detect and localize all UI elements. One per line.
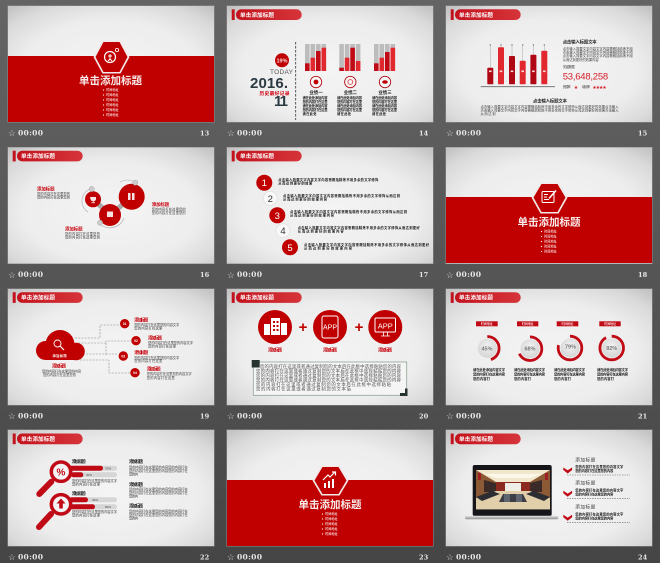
today badge and date: 11	[274, 93, 288, 110]
panel: slide 19 cloud diagram	[8, 288, 214, 406]
label right: 您的内容打在这里您的	[152, 210, 186, 215]
today badge and date: 19%	[276, 58, 288, 64]
node text: 您的内容打在这里您的内容文字	[148, 340, 194, 345]
label right: 您的内容打在这里您的	[152, 206, 186, 211]
right text block: 点击输入标题文本	[563, 38, 597, 46]
donut 68%: 68%	[524, 347, 536, 353]
list text: 从而达到更好的效果内容	[304, 246, 353, 250]
bullet list	[541, 229, 558, 254]
header tab: 单击添加标题	[459, 11, 493, 19]
right column text: 您的内	[129, 493, 138, 498]
candle bar chart	[481, 44, 555, 87]
dashed rules	[567, 475, 630, 523]
icon: monitor app circle: APP	[378, 322, 393, 330]
panel: slide 21 donut charts	[446, 288, 652, 406]
footer slide 19: 19	[200, 412, 210, 420]
panel: slide 14 statistics	[226, 6, 434, 122]
panel: slide 17 numbered list	[226, 147, 434, 264]
node text	[134, 317, 194, 380]
column labels and text: 请在此处添加内容	[302, 95, 328, 100]
header tab: 单击添加标题	[459, 294, 493, 302]
footer slide 15	[446, 128, 648, 139]
donut 45%: 45%	[481, 346, 493, 352]
footer slide 16: 00:00	[18, 270, 43, 279]
header tab: 单击添加标题	[240, 11, 274, 19]
node text: 添加标题	[148, 334, 163, 341]
captions: 请在此处添加内容文字	[473, 367, 506, 372]
numbered nodes: 03	[121, 354, 125, 358]
bottom text block	[480, 98, 619, 116]
bullet list: 时间地址	[325, 511, 339, 516]
donut 92%: 时间地址	[604, 321, 617, 326]
icon: monitor app circle	[368, 310, 402, 344]
bar chart group 1	[305, 44, 326, 71]
panel: slide 20 plus equation	[226, 288, 434, 406]
label top left: 您的内容打在这里您的	[37, 195, 71, 200]
panel: slide 23 title slide	[226, 430, 434, 546]
footer slide 19: 00:00	[18, 412, 43, 420]
bullet list: 时间地址	[106, 97, 120, 102]
node text: 您的内容打在这里	[134, 358, 163, 363]
numbered nodes: 01	[123, 322, 127, 326]
right column text: 您的内	[129, 515, 138, 520]
bullet list	[103, 87, 120, 117]
progress bars 40 and 60: 60%	[105, 505, 111, 509]
item text: 添加标题	[575, 504, 596, 510]
bullet list: 时间地址	[544, 244, 558, 249]
right column text: 您的内容打在这里您的内容您的内容打在	[129, 464, 188, 470]
icon: cloud: 添加标题	[52, 353, 67, 358]
captions: 您的内容打	[514, 376, 532, 381]
node text: 您的内容打在这里您的内容文字	[134, 355, 180, 360]
footer slide 24: 24	[638, 554, 648, 562]
donut 45%	[476, 321, 499, 360]
today badge and date: 2016.	[250, 75, 288, 92]
icon: phone app circle	[313, 310, 347, 344]
right text block: 点击输入简要文字内容文字内容需概括精炼不用	[563, 50, 633, 54]
list text: 从而达到更好的效果内容	[290, 212, 335, 218]
node text: 添加标题	[134, 317, 149, 324]
icon: buildings circle	[258, 310, 292, 344]
dashed timeline	[295, 42, 297, 120]
item text: 添加标题	[575, 456, 596, 464]
footer slide 19: ☆	[8, 412, 16, 422]
bullet list: 时间地址	[544, 239, 558, 244]
bullet list: 时间地址	[106, 87, 120, 92]
right column text: 您的内容打在这里您的内容您的内容打在	[129, 468, 188, 473]
progress bars 40 and 60	[69, 497, 117, 509]
donut 79%	[557, 321, 582, 360]
label top left: 添加标题	[37, 186, 55, 192]
text frame	[252, 360, 408, 396]
bullet list: 时间地址	[325, 531, 339, 536]
footer slide 23: 00:00	[237, 552, 262, 562]
number circles: 1	[262, 178, 267, 189]
number circles	[256, 175, 298, 255]
list text: 从而达到更好的效果内容	[283, 196, 328, 202]
circle labels: 添加标题	[378, 346, 393, 354]
footer slide 14	[227, 128, 429, 139]
label right: 添加标题	[152, 201, 170, 208]
right text block: 点击输入简要文字内容文字内容需概括精炼不用	[563, 46, 633, 51]
right text block: 关键数据	[563, 64, 575, 69]
bullet list: 时间地址	[106, 92, 120, 97]
column labels and text: 请在此处添加内容	[337, 95, 363, 100]
label bottom: 您的内容打在这里您的	[65, 234, 101, 240]
item text: 添加标题	[575, 480, 596, 486]
bottom text block: 点击输入简要文字内容文字内容需概括精炼不用多余的文字修饰从而达到更好的效果点击输入	[480, 108, 619, 112]
panel: slide 15 column chart	[446, 6, 652, 122]
footer slide 13: ☆	[8, 129, 16, 139]
label bottom: 您的内容打在这里您的	[65, 231, 101, 236]
footer slide 20: 00:00	[237, 412, 262, 420]
header tab: 单击添加标题	[459, 435, 493, 443]
footer slide 18: 00:00	[456, 270, 481, 279]
column labels and text: 业绩三	[378, 89, 392, 96]
list text: 点击输入简要文字内容文字内容需概括精炼不用多余的文字修饰从而达到更好	[304, 242, 430, 247]
captions: 您的内容打在这里内容	[554, 372, 586, 376]
bullet list: 时间地址	[325, 516, 339, 521]
node text: 添加标题	[147, 365, 161, 372]
column labels and text: 请在此处添加内容	[372, 103, 398, 108]
node text: 您的内容打在这里您的内容文字	[134, 322, 180, 327]
progress bars 70 and 30: 30%	[86, 473, 92, 477]
captions: 您的内容打	[473, 376, 491, 381]
list text: 从而达到更好的效果	[278, 180, 313, 186]
bullet list: 时间地址	[325, 526, 339, 531]
footer slide 15: 00:00	[456, 128, 481, 138]
text lower: 添加标题	[72, 490, 86, 497]
column labels and text: 请在此处添加内容	[337, 103, 363, 108]
footer slide 13: 00:00	[18, 128, 43, 138]
header tab	[451, 292, 521, 303]
panel: slide 16 connected circles	[8, 147, 214, 264]
footer slide 13: 13	[200, 130, 210, 138]
right text block: ★	[574, 84, 578, 90]
text lower: 您的内容打在这里您的内容文字	[72, 509, 118, 514]
right column text: 添加标题	[129, 481, 144, 488]
node text: 添加标题	[134, 349, 149, 356]
header tab	[451, 434, 521, 444]
list text	[278, 177, 430, 250]
header tab: 单击添加标题	[21, 152, 55, 160]
bullet list: 时间地址	[106, 102, 120, 107]
item text: 您的内容打在这里您的内容	[575, 515, 614, 520]
footer slide 20: 20	[419, 412, 429, 420]
column labels and text: 业绩一	[309, 89, 323, 96]
header tab	[13, 292, 83, 303]
icon: magnifier percent	[39, 462, 71, 494]
circle labels	[268, 346, 393, 354]
item text: 您的内容打在这里您的内容文字	[575, 512, 624, 516]
number circles: 4	[280, 226, 286, 237]
right text block: ★★★★	[592, 84, 606, 90]
footer slide 23	[227, 552, 429, 563]
header tab	[451, 9, 521, 20]
number circles: 5	[287, 243, 293, 254]
icon: phone app circle: APP	[323, 324, 337, 332]
node text: 您的内容打在这里	[147, 375, 175, 380]
captions: 您的内容打	[554, 376, 572, 381]
header tab: 单击添加标题	[240, 294, 274, 302]
text upper: 您的内容打在这里您的内容文字	[72, 478, 118, 483]
donut 68%	[517, 321, 542, 360]
panel: slide 24 laptop	[446, 430, 652, 546]
footer slide 16	[8, 270, 210, 281]
right text block: 53,648,258	[563, 72, 608, 82]
footer slide 15: ☆	[446, 129, 454, 139]
column labels and text: 您的内容打在这里	[337, 107, 363, 112]
icon: cloud	[36, 330, 85, 360]
text upper	[72, 458, 118, 486]
right text block: 增长率	[582, 84, 591, 89]
text lower: 您的内容打在这里	[72, 512, 101, 518]
list text: 点击输入简要文字内容文字内容需概括精炼不用多余的文字修饰	[278, 177, 379, 182]
label top left	[37, 186, 71, 200]
footer slide 18: 18	[638, 271, 648, 279]
icon: magnifier arrow	[39, 495, 71, 527]
panel: slide 22 magnifiers	[8, 430, 214, 546]
icon: pencil and note	[542, 190, 556, 202]
footer slide 22: 22	[200, 554, 209, 562]
text frame: 您的内容打在这里或者通过复制您的文本后在此框中选择粘贴您的内容	[256, 368, 402, 374]
text lower	[72, 490, 118, 518]
item text	[575, 456, 624, 520]
footer slide 24	[446, 552, 648, 563]
label top left: 您的内容打在这里您的	[37, 191, 71, 196]
node text: 您的内容打在这里	[148, 344, 177, 348]
right text block: 点击输入简要文字内容文字内容需概括精炼不用	[563, 53, 633, 58]
item text: 您的内容打在这里您的内容	[575, 468, 614, 473]
numbered nodes	[119, 319, 141, 377]
header tab	[232, 292, 302, 303]
footer slide 16: ☆	[8, 271, 16, 281]
progress bars 70 and 30: 70%	[105, 466, 111, 470]
icon: rising chart	[323, 472, 336, 488]
captions	[473, 367, 629, 381]
footer slide 21: ☆	[446, 412, 454, 422]
text frame: 您的内容打在这里或者通过复制您的文本后在此框中选择粘贴您的内容	[260, 363, 402, 370]
list text: 点击输入简要文字内容文字内容需概括精炼不用多余的文字修饰从而达到	[290, 209, 408, 214]
captions: 您的内容打在这里内容	[473, 372, 506, 376]
progress bars 40 and 60: 40%	[92, 498, 98, 502]
icon: plus: +	[299, 319, 308, 336]
right text block: 完成率	[563, 84, 571, 89]
right column text: 您的内容打在这里您的内容您的内容打在	[129, 486, 188, 491]
list text: 从而达到更好的效果内容	[298, 228, 344, 234]
footer slide 15: 15	[638, 130, 648, 138]
chevrons	[563, 468, 572, 521]
slide title: 单击添加标题	[79, 74, 142, 87]
text frame: 您的内容打在这里或者通过复制您的文本后在此框中选择粘贴您的内容	[256, 372, 402, 379]
footer slide 24: ☆	[446, 553, 454, 563]
bar chart group 2	[339, 44, 360, 71]
right column text: 您的内容打在这里您的内容您的内容打在	[129, 508, 188, 513]
footer slide 21: 21	[638, 412, 647, 420]
numbered nodes: 02	[134, 339, 138, 343]
right text block: 从而达到更好的效果内容	[563, 57, 599, 62]
captions: 您的内容打	[597, 376, 615, 381]
bullet list: 时间地址	[325, 521, 339, 526]
footer slide 14: 14	[419, 130, 429, 138]
footer slide 16: 16	[200, 271, 210, 279]
footer slide 20	[227, 412, 429, 422]
today badge and date: TODAY	[270, 69, 294, 76]
donut 92%	[599, 321, 624, 360]
footer slide 23: 23	[419, 554, 429, 562]
circle labels: 添加标题	[268, 346, 283, 354]
donut 45%: 时间地址	[481, 321, 494, 326]
right column text	[129, 458, 188, 520]
panel: slide 18 title slide	[446, 147, 652, 264]
circle diagram	[82, 180, 145, 228]
number circles: 3	[275, 211, 280, 222]
column labels and text	[302, 89, 398, 116]
footer slide 21	[446, 412, 647, 422]
right text block	[563, 38, 633, 90]
item text: 您的内容打在这里您的内容文字	[575, 464, 624, 469]
bullet list: 时间地址	[544, 229, 558, 234]
cloud caption: 您的内容打在这里您的	[43, 372, 77, 377]
header tab: 单击添加标题	[240, 152, 274, 160]
footer slide 21: 00:00	[456, 412, 481, 420]
donut 79%: 79%	[565, 344, 576, 350]
donut 68%: 时间地址	[522, 321, 535, 326]
list text: 点击输入简要文字内容文字内容需概括精炼不用多余的文字修饰从而达到更好	[298, 225, 420, 230]
text frame: 您的内容打在这里或者通过复制您的文本后在此框中选择粘贴您的内容	[256, 376, 402, 384]
cloud caption	[42, 362, 82, 377]
column labels and text: 您的内容打在这里	[337, 99, 363, 104]
column labels and text: 您的内容打在这里	[302, 107, 328, 112]
footer slide 19	[8, 412, 210, 422]
numbered nodes: 04	[133, 371, 137, 375]
bottom text block: 从而达到	[480, 111, 496, 116]
node text: 您的内容打在这里	[134, 326, 163, 330]
header tab: 单击添加标题	[21, 294, 55, 302]
column labels and text: 请在此处添加内容	[372, 95, 398, 100]
item text: 您的内容打在这里您的内容	[575, 491, 614, 496]
text upper: 您的内容打在这里	[72, 482, 101, 486]
item text: 您的内容打在这里您的内容文字	[575, 488, 624, 492]
footer slide 24: 00:00	[456, 552, 481, 562]
circle labels: 添加标题	[323, 346, 338, 354]
column labels and text: 请在此处添加内容	[302, 103, 328, 108]
column labels and text: 请在此处	[337, 111, 352, 116]
footer slide 22	[8, 552, 209, 563]
slide title: 单击添加标题	[298, 498, 362, 511]
captions: 请在此处添加内容文字	[597, 367, 629, 372]
bullet list	[322, 511, 339, 536]
footer slide 14: 00:00	[237, 128, 262, 138]
captions: 您的内容打在这里内容	[597, 372, 629, 376]
donut 92%: 92%	[606, 346, 617, 352]
right column text: 添加标题	[129, 458, 144, 465]
footer slide 22: ☆	[8, 553, 16, 563]
cloud caption: 添加标题	[52, 362, 67, 369]
panel: slide 13 title slide	[8, 6, 214, 122]
bullet list: 时间地址	[544, 249, 558, 254]
footer slide 14: ☆	[227, 129, 235, 139]
bottom text block: 点击输入标题文本	[533, 98, 568, 104]
footer slide 22: 00:00	[18, 552, 43, 562]
laptop with meeting room photo	[465, 465, 558, 519]
text upper: 添加标题	[72, 458, 86, 465]
captions: 请在此处添加内容文字	[514, 367, 546, 372]
column labels and text: 请在此处	[372, 111, 387, 116]
footer slide 18	[446, 270, 648, 281]
right column text: 您的内容打在这里您的内容您的内容打在	[129, 490, 188, 495]
right column text: 您的内	[129, 472, 138, 476]
node text: 您的内容打在这里您的内容文字	[147, 371, 192, 376]
footer slide 20: ☆	[227, 412, 235, 422]
right column text: 添加标题	[129, 502, 144, 510]
footer slide 17: 17	[419, 271, 429, 279]
captions: 您的内容打在这里内容	[514, 372, 546, 376]
footer slide 17: ☆	[227, 271, 235, 281]
column labels and text: 业绩二	[344, 89, 357, 96]
footer slide 18: ☆	[446, 271, 454, 281]
today badge and date	[250, 53, 294, 110]
header tab	[232, 9, 302, 20]
column labels and text: 您的内容打在这里	[372, 107, 398, 112]
footer slide 23: ☆	[227, 553, 235, 563]
text frame: 您的内容打在这里或者通过复制您的文本后	[256, 386, 352, 392]
column labels and text: 请在此处	[302, 111, 317, 116]
captions: 请在此处添加内容文字	[554, 367, 586, 372]
donut 79%: 时间地址	[562, 321, 574, 326]
label bottom	[65, 226, 101, 240]
column labels and text: 您的内容打在这里	[302, 99, 328, 104]
bullet list: 时间地址	[106, 112, 120, 117]
bottom text block: 点击输入简要文字内容文字内容需概括精炼不用多余的文字修饰从而达到更好的效果点击输入	[480, 104, 619, 109]
header tab: 单击添加标题	[21, 435, 55, 443]
column labels and text: 您的内容打在这里	[372, 99, 398, 104]
icon circles	[310, 76, 391, 88]
footer slide 13	[8, 128, 210, 139]
header tab	[13, 151, 83, 161]
text frame: 您的内容打在这里或者通过复制您的文本后在此框中选择粘贴	[256, 381, 392, 388]
bullet list: 时间地址	[544, 234, 558, 239]
number circles: 2	[268, 194, 273, 205]
icon: magnifier percent: %	[57, 468, 66, 478]
footer slide 17: 00:00	[237, 270, 262, 279]
progress bars 70 and 30	[69, 466, 117, 477]
dashed connectors	[75, 325, 131, 373]
bar chart group 3	[374, 44, 395, 71]
right column text: 您的内容打在这里您的内容您的内容打在	[129, 512, 188, 517]
cloud caption: 您的内容打在这里您的内容	[42, 368, 82, 374]
today badge and date: 历史最好记录	[260, 90, 290, 97]
footer slide 17	[227, 270, 429, 281]
icon: clock person	[104, 48, 119, 62]
label right	[152, 201, 186, 215]
list text: 点击输入简要文字内容文字内容需概括精炼不用多余的文字修饰从而达到	[283, 193, 401, 198]
header tab	[13, 434, 83, 444]
header tab	[232, 151, 302, 161]
bullet list: 时间地址	[106, 107, 120, 112]
label bottom: 添加标题	[65, 226, 83, 232]
icon: plus: +	[355, 319, 364, 336]
slide title: 单击添加标题	[518, 216, 581, 228]
